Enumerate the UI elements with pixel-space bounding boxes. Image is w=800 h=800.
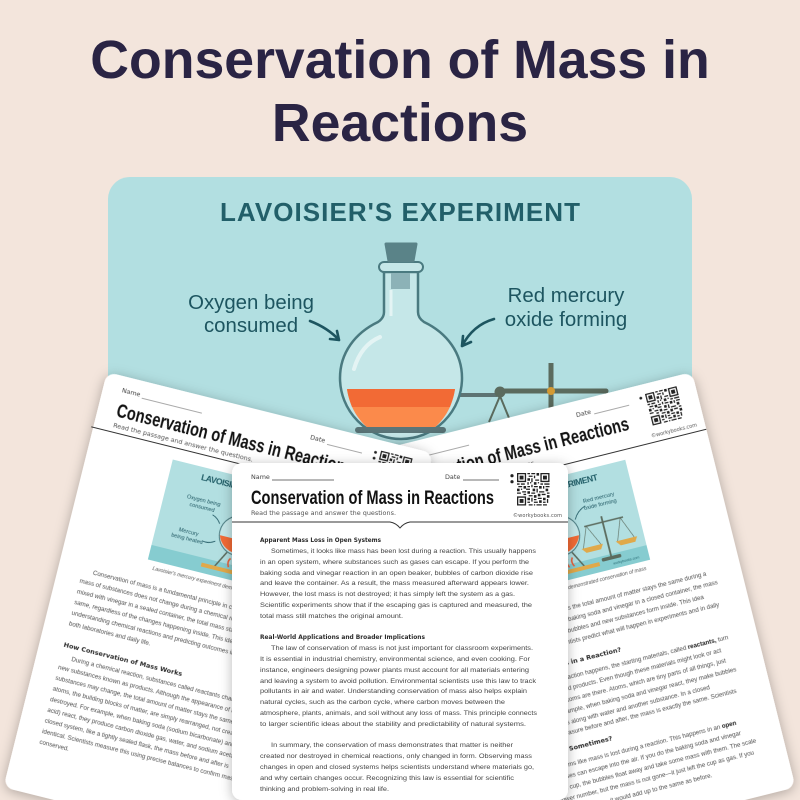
passage text: identical. Scientists measure this using precise balances to confirm mass is (41, 728, 243, 785)
worksheet illustration: being heated (170, 532, 203, 546)
passage text: substances may change, the total amount of matter stays the same because (55, 675, 260, 732)
illustration title: LAVOISIER'S EXPERIMENT (220, 197, 580, 227)
passage text: closed system, like a tightly sealed flask, the mass before and after is (44, 717, 229, 770)
header: ©workybooks.com (650, 421, 698, 440)
worksheet illustration (148, 460, 333, 599)
section: summary: and why certain changes occur. Recognizing this law is essential for scientific (260, 775, 515, 782)
image caption: Lavoisier's mercury experiment demonstrated conservation of mass (152, 566, 302, 609)
section: apparent mass loss: total mass still matches the original amount. (260, 613, 403, 620)
passage text: into new materials called products. Even though these materials might look or act (505, 647, 722, 708)
section: apparent mass loss: Scientific experiments show that if the escaping gas is captured and measured, the (260, 602, 532, 609)
passage text: When a chemical reaction happens, the starting materials, called reactants, turn (514, 634, 730, 694)
section: real-world applications: to larger scientific ideas about the stability and predictability of natural systems. (260, 721, 526, 728)
label: oxygen being consumed: consumed (204, 315, 298, 337)
worksheet illustration: oxide forming (583, 498, 618, 512)
section: real-world applications: instance, engineers designing power plants must account for all materials entering (260, 667, 529, 674)
worksheet illustration: workybooks.com (613, 555, 640, 566)
name and date fields: Name (251, 473, 270, 481)
section: apparent mass loss: Apparent Mass Loss in Open Systems (260, 536, 381, 544)
balance scale (460, 363, 606, 440)
worksheet: right page (366, 372, 796, 800)
passage text: atoms, the building blocks of matter, are simply rearranged, not created or (52, 685, 250, 741)
passage text (449, 568, 764, 800)
arrow: to flask from right (462, 319, 494, 346)
header: Conservation of Mass in Reactions (390, 414, 631, 493)
passage text: During a chemical reaction, substances called reactants change into (71, 656, 254, 708)
passage text: system, where gases can escape into the air. If you do the baking soda and vinegar (518, 730, 742, 792)
worksheet illustration: Oxygen being (186, 494, 221, 508)
section: apparent mass loss: baking soda and vinegar reaction in an open beaker, bubbles of carbon dioxide rise (260, 570, 533, 577)
main title: Reactions (272, 93, 528, 153)
section: apparent mass loss: Sometimes, it looks like mass has been lost during a reaction. This usually happens (271, 548, 537, 555)
passage text: move around. For example, when baking soda and vinegar react, they make bubbles (510, 666, 737, 729)
passage text: mixed with vinegar in a sealed container, the total mass stays exactly the (76, 588, 272, 643)
header (90, 381, 431, 513)
section: real-world applications: It is essential in industrial chemistry, environmental science, and even cooking. For (260, 656, 531, 663)
worksheet: left page (2, 372, 433, 800)
label: red mercury oxide forming: Red mercury (508, 285, 625, 307)
header: Read the passage and answer the questions. (396, 459, 537, 501)
passage text: Conservation of mass means the total amount of matter stays the same during a (492, 571, 708, 631)
label: oxygen being consumed: Oxygen being (188, 292, 314, 314)
passage text (39, 567, 309, 800)
passage text: Sometimes it seems like mass is lost during a reaction. This happens in an open (521, 720, 737, 780)
panel: Lavoisier's experiment illustration (108, 177, 692, 597)
label: red mercury oxide forming (505, 285, 627, 331)
passage text: understanding chemical reactions and predicting outcomes in (71, 610, 236, 657)
passage text: helps scientists predict what will happen in experiments and in daily (539, 601, 721, 653)
passage text: Conservation of mass is a fundamental principle in chemistry stating that the total (92, 570, 309, 630)
header: Name (387, 454, 407, 466)
section: apparent mass loss: However, the lost mass is not destroyed; it has simply left the system as a gas. (260, 591, 515, 598)
worksheet illustration: Mercury (178, 527, 199, 538)
passage text: destroyed. For example, when baking soda (sodium bicarbonate) and vinegar (acetic (49, 696, 276, 759)
passage text: acid) react, they produce carbon dioxide gas, water, and sodium acetate. In a (47, 707, 254, 765)
passage text: both laboratories and daily life. (68, 620, 152, 648)
section: summary: thinking and problem-solving in real life. (260, 786, 389, 793)
QR code (510, 473, 550, 506)
section: real-world applications (260, 633, 538, 728)
passage text: chemical reaction. If you mix baking soda and vinegar in a closed container, the mass (490, 579, 719, 643)
passage text: How Conservation of Mass Works (63, 641, 183, 678)
passage text: different, the same atoms are there. Atoms, which are tiny parts of all things, just (512, 657, 727, 717)
section: real-world applications: natural cycles, such as the carbon cycle, where carbon moves between the (260, 699, 505, 706)
section: summary: changes in open and closed systems helps scientists understand where materials go, (260, 764, 534, 771)
section: real-world applications: pollutants in air and water. Understanding conservation of mass also helps explain (260, 688, 527, 695)
header: ©workybooks.com (366, 488, 413, 506)
section: real-world applications: The law of conservation of mass is not just important for classroom experiments. (271, 645, 533, 652)
header: Date (309, 433, 326, 445)
worksheet illustration (465, 460, 650, 600)
section: summary: In summary, the conservation of mass demonstrates that matter is neither (271, 742, 514, 749)
passage text: What Happens in a Reaction? (516, 645, 622, 679)
name and date fields: Date (445, 473, 460, 481)
passage text: of carbon dioxide gas along with water and another substance. In a closed (512, 684, 711, 740)
section: summary: created nor destroyed in chemical reactions, only changed in form. Observing mass (260, 753, 533, 760)
label: oxygen being consumed (188, 292, 314, 337)
main title (90, 30, 710, 153)
worksheet illustration: LAVOISIER'S EXPERIMENT (497, 472, 600, 506)
passage text: container, if you measure before and after, the mass is exactly the same. Scientists (515, 688, 737, 750)
passage text: same, regardless of the changes happening inside. This idea is key to (73, 599, 261, 652)
worksheet: centre page (232, 463, 568, 800)
passage text: conserved. (39, 739, 70, 753)
sheet background (3, 372, 433, 800)
name and date fields (251, 473, 499, 481)
section: apparent mass loss: in an open system, where substances such as gases can escape. If you perform the (260, 559, 529, 566)
section: real-world applications: and leaving a system to avoid pollution. Environmental scientists use this law to track (260, 678, 537, 685)
label: red mercury oxide forming: oxide forming (505, 309, 627, 331)
instructions: Read the passage and answer the questions. (251, 509, 396, 517)
header (368, 382, 707, 515)
main title: Conservation of Mass in (90, 30, 710, 90)
arrow: to flask from left (310, 321, 339, 340)
sheet background (366, 372, 796, 800)
image caption: Lavoisier's mercury experiment demonstrated conservation of mass (498, 566, 648, 609)
worksheet illustration: consumed (189, 502, 215, 514)
copyright: ©workybooks.com (513, 512, 562, 519)
worksheet illustration: Red mercury (583, 491, 615, 505)
header: Date (575, 408, 592, 419)
sheet background (232, 463, 568, 800)
header: Conservation of Mass in Reactions (114, 401, 355, 480)
section: apparent mass loss (260, 536, 537, 620)
passage text: does not change, even as bubbles and new substances form inside. This idea (497, 594, 705, 652)
passage text: Why Does Mass Change Sometimes? (481, 734, 613, 774)
section: apparent mass loss: and leave the container. As a result, the mass measured afterward appears lower. (260, 580, 529, 587)
worksheet title: Conservation of Mass in Reactions (251, 488, 494, 509)
header: Read the passage and answer the questions. (112, 421, 254, 464)
passage text: mass of substances does not change during a chemical reaction. If baking soda is (79, 578, 298, 639)
section: real-world applications: atmosphere, plants, animals, and soil without any loss of mass. This principle connects (260, 710, 538, 717)
passage text: new substances known as products. Although the appearance of the (57, 664, 241, 716)
section: summary (260, 742, 534, 793)
flask (340, 244, 462, 439)
section: real-world applications: Real-World Applications and Broader Implications (260, 633, 425, 641)
header: Name (121, 386, 141, 399)
worksheet illustration: LAVOISIER'S EXPERIMENT (200, 472, 302, 507)
header rule (232, 522, 568, 528)
